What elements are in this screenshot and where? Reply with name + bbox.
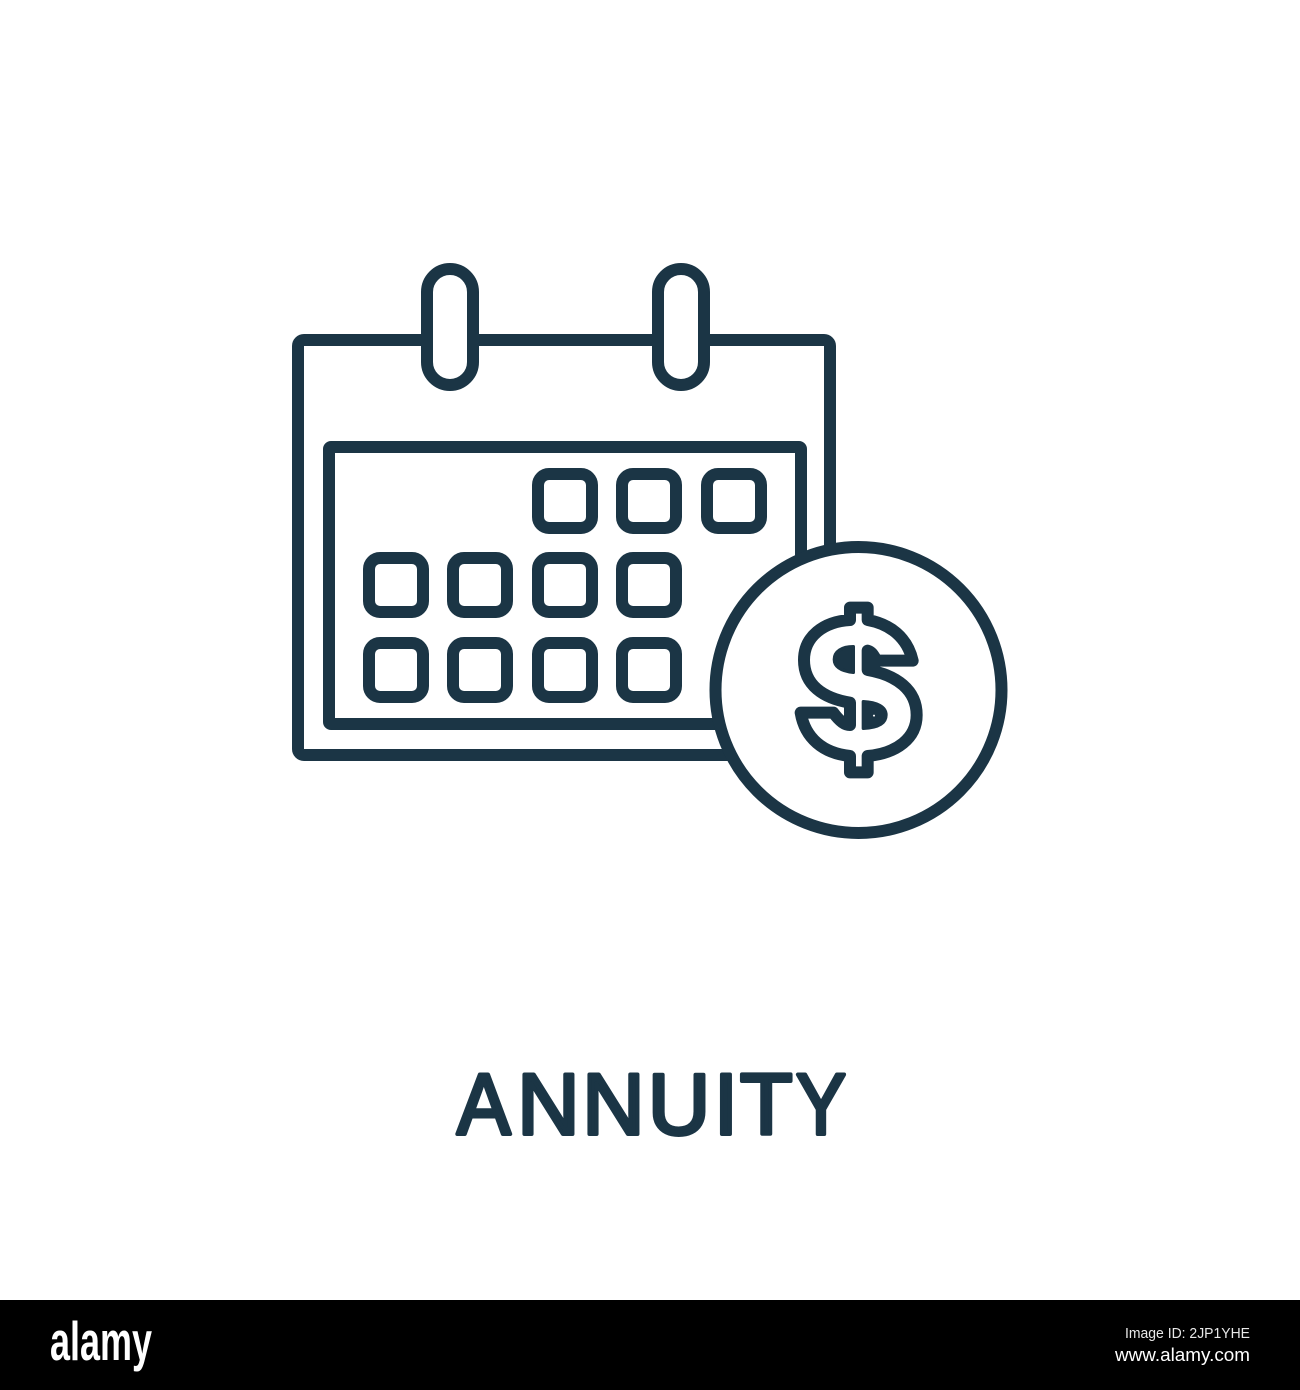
footer website: www.alamy.com <box>1114 1345 1250 1365</box>
title: ANNUITY: T <box>740 1057 793 1153</box>
footer bar <box>0 1300 1300 1390</box>
calendar inner page <box>329 447 801 724</box>
title: ANNUITY: N <box>582 1057 645 1153</box>
title: ANNUITY: N <box>517 1057 580 1153</box>
title: ANNUITY: I <box>714 1057 738 1153</box>
dollar coin circle <box>716 547 1002 833</box>
footer image id: Image ID: 2JP1YHE <box>1125 1325 1250 1342</box>
calendar outer frame <box>298 340 830 755</box>
title: ANNUITY: A <box>457 1057 511 1153</box>
title: ANNUITY: U <box>648 1057 710 1153</box>
calendar day cells <box>369 474 761 697</box>
footer logo: alamy: alamy <box>50 1310 152 1372</box>
icon: annuity calendar with dollar coin <box>298 269 1002 833</box>
title: ANNUITY: Y <box>796 1057 846 1153</box>
calendar binding rings <box>427 269 704 385</box>
dollar sign <box>801 608 917 772</box>
